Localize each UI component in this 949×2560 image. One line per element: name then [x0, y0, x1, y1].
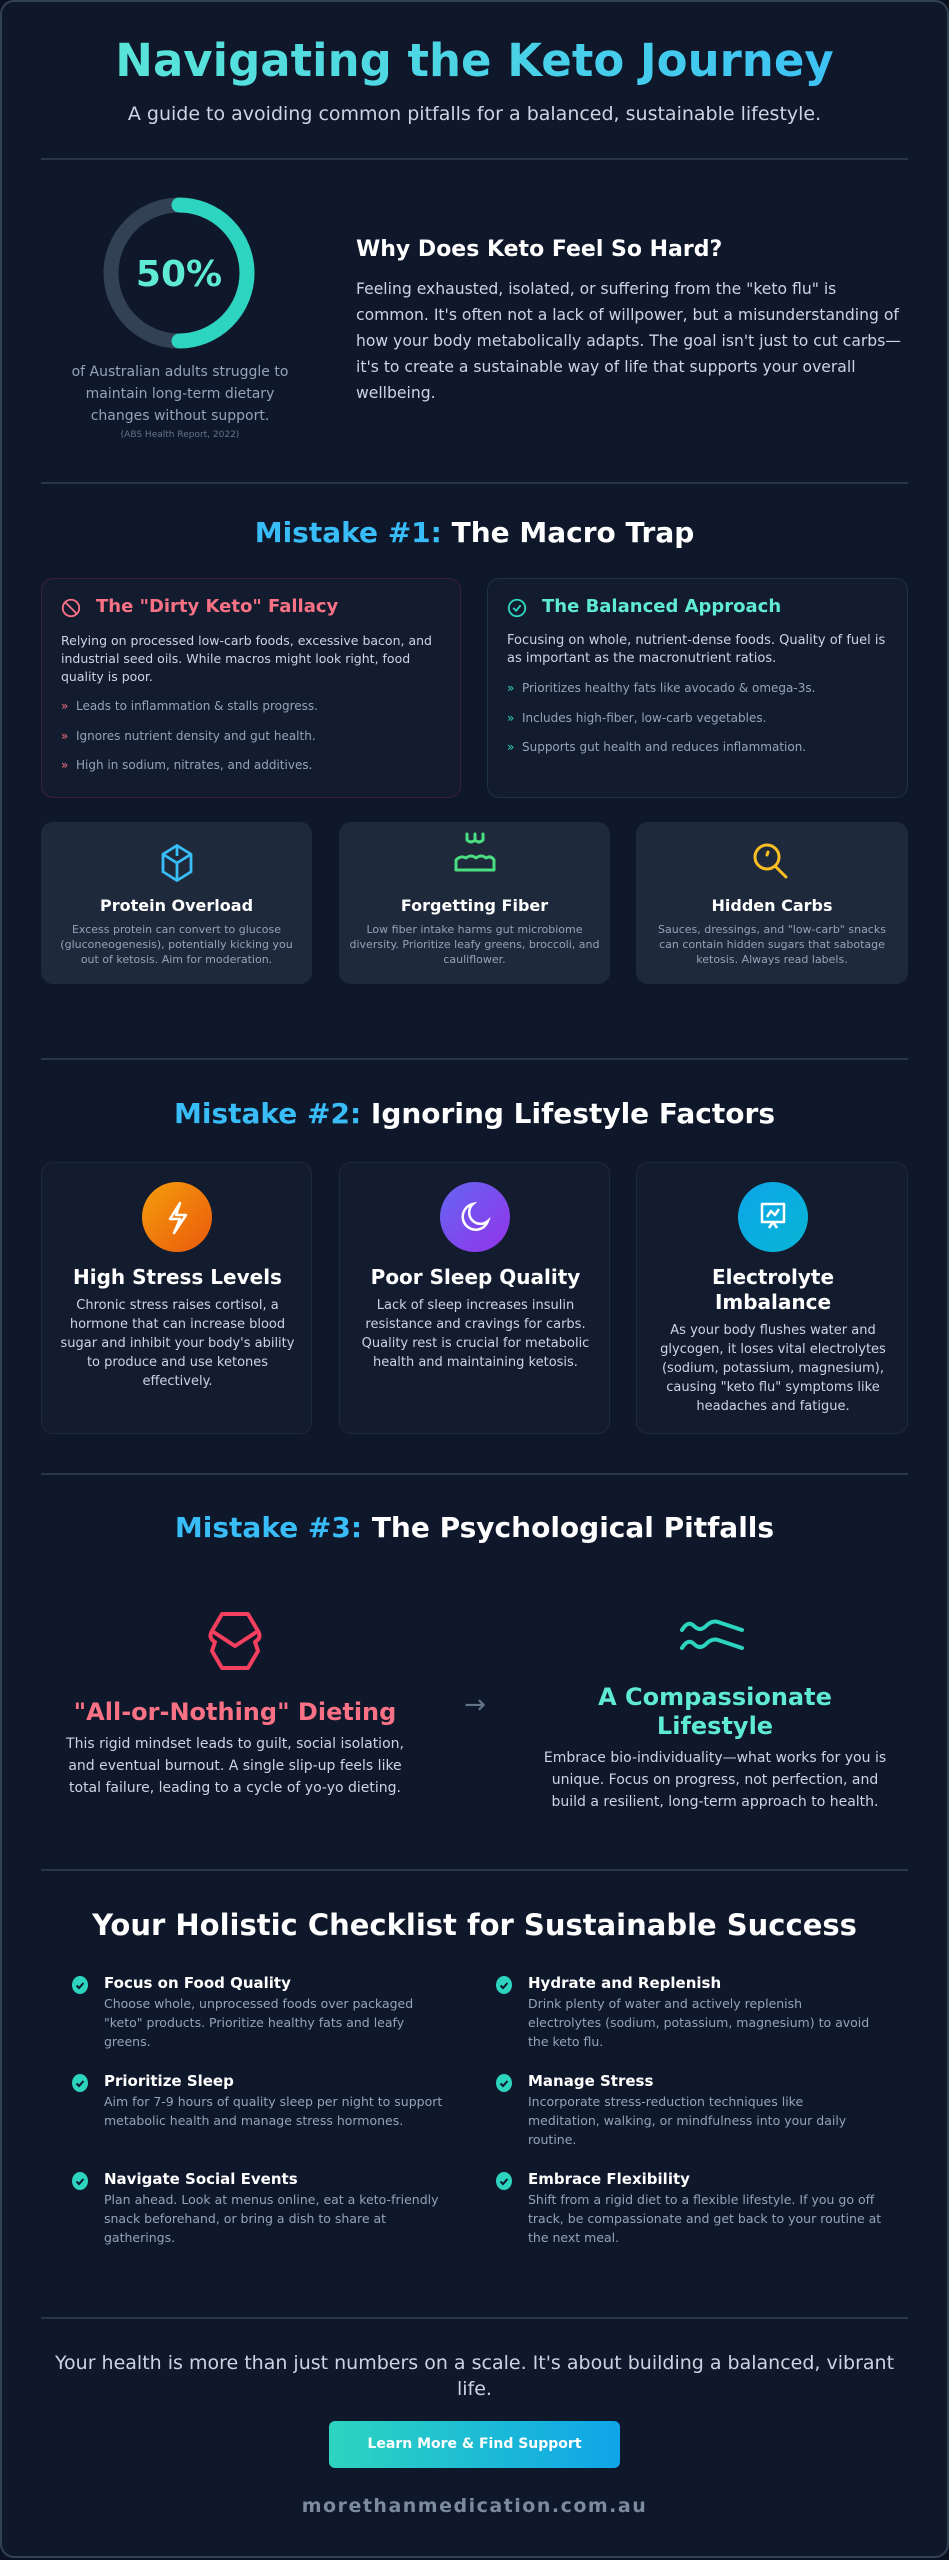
item: hydrate	[496, 1974, 869, 2049]
panel: all-or-nothing	[66, 1612, 404, 1796]
stat caption: of Australian adults struggle to maintain long-term dietary changes without support.	[72, 364, 288, 424]
card: poor sleep: Lack of sleep increases insulin resistance and cravings for carbs. Quality rest is crucial for metabolic health and maintaining ketosis.	[362, 1298, 589, 1370]
panel: balanced approach: » Supports gut health and reduces inflammation.	[507, 740, 806, 754]
panel: compassionate lifestyle: Lifestyle	[657, 1712, 773, 1740]
card: electrolyte: Electrolyte	[712, 1265, 834, 1289]
checklist: Shift from a rigid diet to a flexible lifestyle. If you go off track, be compassionate and get back to your routine at the next meal.	[528, 2192, 881, 2245]
panel: dirty keto: » Leads to inflammation & stalls progress.	[61, 699, 318, 713]
card: poor sleep	[339, 1162, 610, 1434]
footer: morethanmedication.com.au	[302, 2495, 647, 2517]
item: food quality	[72, 1974, 413, 2049]
card: electrolyte: Imbalance	[715, 1290, 831, 1314]
card: protein overload	[41, 822, 312, 984]
icon: moon	[440, 1182, 510, 1252]
intro text: Why Does Keto Feel So Hard?	[356, 237, 722, 262]
item: flexibility	[496, 2170, 881, 2245]
card: protein overload: Protein Overload	[100, 896, 253, 915]
checklist: Focus on Food Quality	[104, 1974, 291, 1992]
icon: waves	[680, 1620, 744, 1650]
item: social	[72, 2170, 439, 2245]
card: forgetting fiber: Low fiber intake harms gut microbiome diversity. Prioritize leafy greens, broccoli, and cauliflower.	[350, 923, 599, 966]
icon: bowl	[454, 832, 496, 872]
stat caption: (ABS Health Report, 2022)	[121, 430, 239, 440]
card: forgetting fiber: Forgetting Fiber	[401, 896, 548, 915]
panel: dirty keto	[41, 578, 461, 798]
card: high stress: High Stress Levels	[73, 1265, 282, 1289]
card: hidden carbs: Sauces, dressings, and "low-carb" snacks can contain hidden sugars that sabotage ketosis. Always read labels.	[658, 923, 886, 966]
panel: all-or-nothing: "All-or-Nothing" Dieting	[74, 1698, 396, 1726]
closing text: Your health is more than just numbers on a scale. It's about building a balanced, vibrant life.	[55, 2352, 894, 2400]
checklist: Navigate Social Events	[104, 2170, 298, 2188]
panel: dirty keto: » Ignores nutrient density and gut health.	[61, 728, 316, 742]
panel: compassionate lifestyle: Embrace bio-individuality—what works for you is unique. Focus on progress, not perfection, and build a resilient, long-term approach to health.	[544, 1750, 886, 1810]
heading: mistake 1: Mistake #1: The Macro Trap	[255, 516, 694, 549]
item: sleep	[72, 2072, 442, 2128]
checklist: Manage Stress	[528, 2072, 653, 2090]
checklist: Choose whole, unprocessed foods over packaged "keto" products. Prioritize healthy fats and leafy greens.	[104, 1996, 413, 2049]
icon: cube	[162, 844, 192, 882]
checklist: Aim for 7-9 hours of quality sleep per night to support metabolic health and manage stress hormones.	[104, 2094, 442, 2128]
panel: balanced approach: Focusing on whole, nutrient-dense foods. Quality of fuel is as important as the macronutrient ratios.	[507, 633, 885, 666]
checklist	[72, 1974, 881, 2245]
arrow: →	[464, 1690, 486, 1720]
card: protein overload: Excess protein can convert to glucose (gluconeogenesis), potentially kicking you out of ketosis. Aim for moderation.	[60, 923, 293, 966]
heading: mistake 3: Mistake #3: The Psychological Pitfalls	[175, 1511, 774, 1544]
panel: balanced approach	[487, 578, 908, 798]
stat: donut chart: 50%	[136, 254, 222, 295]
checklist: Hydrate and Replenish	[528, 1974, 721, 1992]
item: stress	[496, 2072, 846, 2147]
stat: donut chart	[72, 198, 288, 440]
panel: all-or-nothing: This rigid mindset leads to guilt, social isolation, and eventual burnout. A single slip-up feels like total failure, leading to a cycle of yo-yo dieting.	[66, 1736, 404, 1796]
card: forgetting fiber	[339, 822, 610, 984]
icon: chart board	[738, 1182, 808, 1252]
checklist: Embrace Flexibility	[528, 2170, 690, 2188]
card: poor sleep: Poor Sleep Quality	[371, 1265, 580, 1289]
heading: mistake 2: Mistake #2: Ignoring Lifestyle Factors	[174, 1097, 775, 1130]
panel: balanced approach: » Prioritizes healthy fats like avocado & omega-3s.	[507, 681, 815, 695]
card: high stress	[41, 1162, 312, 1434]
intro text: Feeling exhausted, isolated, or suffering from the "keto flu" is common. It's often not a lack of willpower, but a misunderstanding of how your body metabolically adapts. The goal isn't just to cut carbs—it's to create a sustainable way of life that supports your overall wellbeing.	[356, 280, 901, 402]
card: electrolyte	[636, 1162, 908, 1434]
panel: balanced approach: The Balanced Approach	[542, 596, 781, 617]
subtitle: A guide to avoiding common pitfalls for a balanced, sustainable lifestyle.	[128, 103, 821, 125]
panel: dirty keto: » High in sodium, nitrates, and additives.	[61, 758, 312, 772]
panel: dirty keto: The "Dirty Keto" Fallacy	[96, 596, 338, 617]
checklist: electrolytes (sodium, potassium, magnesium) to avoid the keto flu.	[528, 2015, 869, 2049]
panel: dirty keto: Relying on processed low-carb foods, excessive bacon, and industrial seed oils. While macros might look right, food quality is poor.	[61, 633, 432, 684]
button	[329, 2421, 620, 2468]
checklist: Prioritize Sleep	[104, 2072, 234, 2090]
icon: check circle	[508, 598, 526, 618]
card: high stress: Chronic stress raises cortisol, a hormone that can increase blood sugar and inhibit your body's ability to produce and use ketones effectively.	[61, 1298, 294, 1389]
checklist: Plan ahead. Look at menus online, eat a keto-friendly snack beforehand, or bring a dish to share at gatherings.	[104, 2192, 439, 2245]
card: electrolyte: As your body flushes water and glycogen, it loses vital electrolytes (sodium, potassium, magnesium), causing "keto flu" symptoms like headaches and fatigue.	[660, 1323, 886, 1414]
panel: compassionate lifestyle: A Compassionate	[598, 1683, 832, 1711]
icon: broken shield	[208, 1612, 262, 1670]
panel: compassionate lifestyle	[544, 1620, 886, 1810]
button: Learn More & Find Support	[367, 2436, 582, 2452]
icon: magnifier	[754, 844, 788, 879]
checklist: Drink plenty of water and actively replenish	[528, 1996, 802, 2011]
checklist: Incorporate stress-reduction techniques like meditation, walking, or mindfulness into your daily routine.	[528, 2094, 846, 2147]
panel: balanced approach: » Includes high-fiber, low-carb vegetables.	[507, 710, 766, 724]
icon: lightning	[142, 1182, 212, 1252]
card: hidden carbs: Hidden Carbs	[712, 896, 832, 915]
icon: ban	[62, 598, 80, 618]
title	[0, 32, 949, 90]
card: hidden carbs	[636, 822, 908, 984]
heading: checklist: Your Holistic Checklist for Sustainable Success	[92, 1908, 857, 1942]
